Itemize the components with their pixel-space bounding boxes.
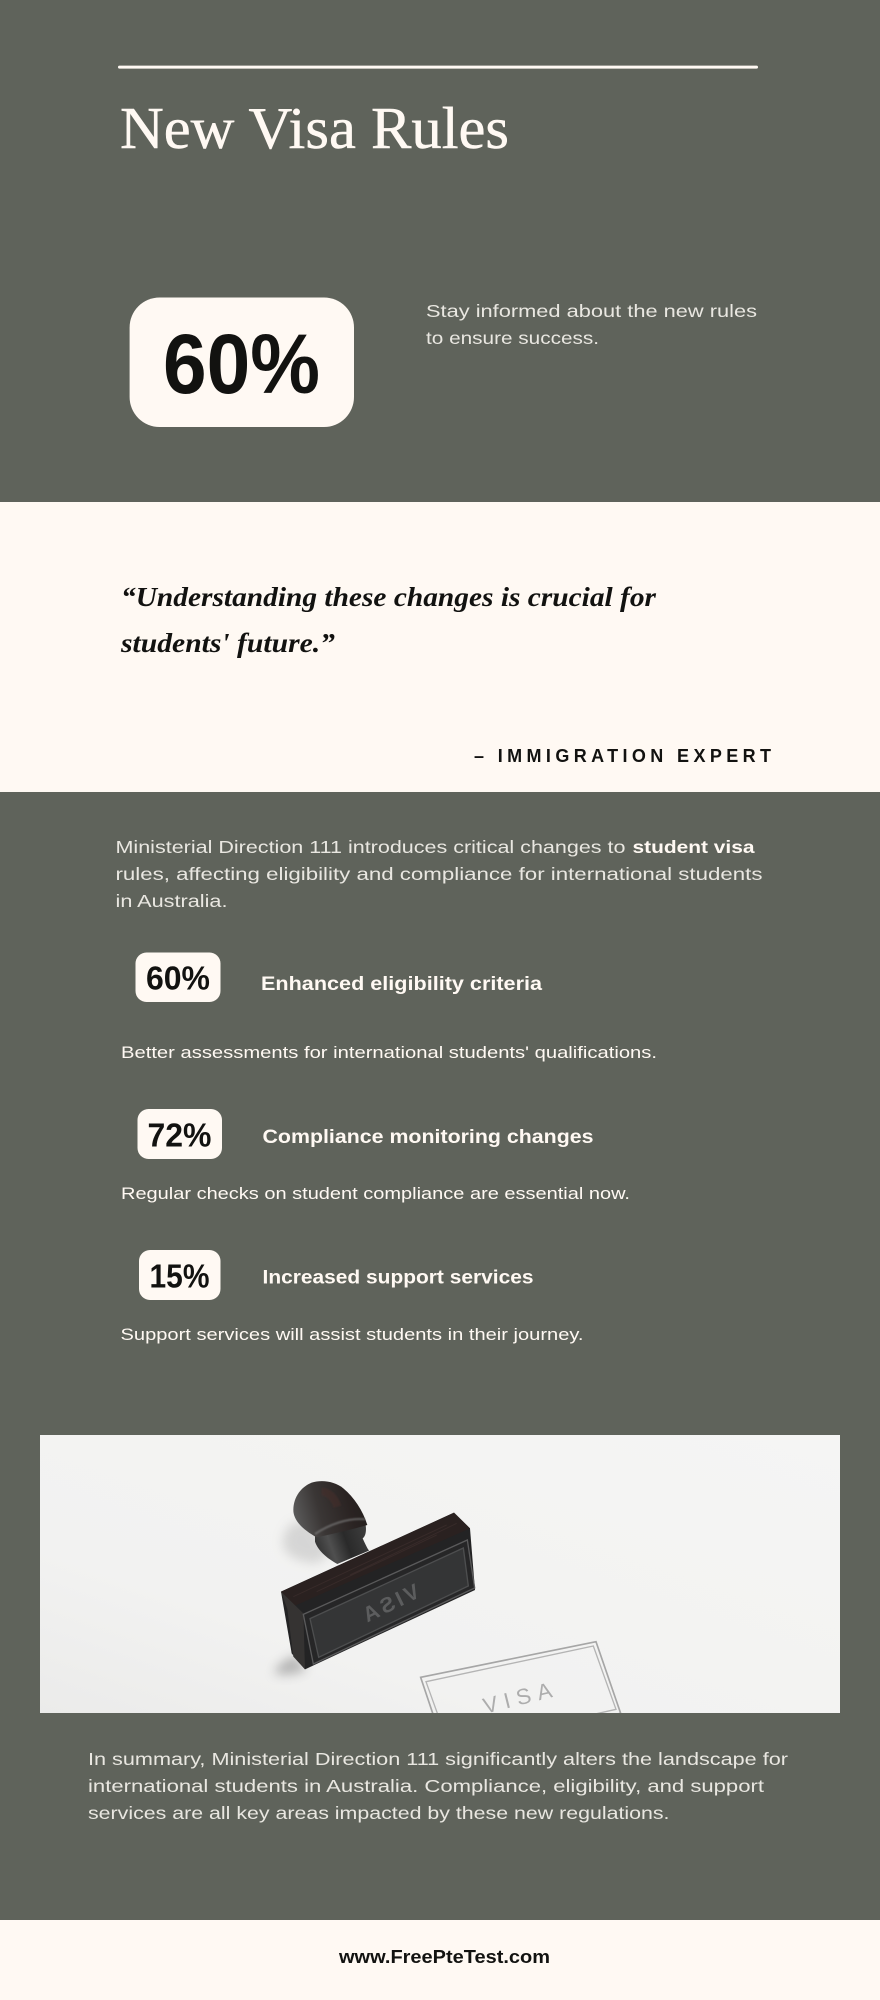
stat item: compliance [121,1109,630,1203]
quote: students' future.” [120,628,336,658]
quote attribution: – IMMIGRATION EXPERT [474,746,771,766]
item description: Regular checks on student compliance are essential now. [121,1184,630,1203]
handle neck [315,1522,369,1564]
text block: introduction paragraph [116,837,763,911]
item heading: Increased support services [262,1266,534,1288]
text block: summary: international students in Australia. Compliance, eligibility, and support [88,1776,764,1796]
stat item: support [120,1250,584,1344]
badge [136,952,220,1002]
stat box [130,298,354,427]
stat item: eligibility [121,952,657,1062]
title: New Visa Rules [120,95,509,161]
footer website link: www.FreePteTest.com [338,1947,550,1967]
text block: introduction paragraph: student visa [632,837,755,857]
badge number: 60% [146,960,210,998]
text block: summary: services are all key areas impacted by these new regulations. [88,1803,670,1823]
panel: quote background [0,502,880,792]
photo: visa rubber stamp [40,1435,840,1713]
text block: summary: In summary, Ministerial Direction 111 significantly alters the landscape for [88,1749,788,1769]
item description: Support services will assist students in their journey. [120,1325,584,1344]
panel: header background [0,0,880,502]
quote: “Understanding these changes is crucial for [121,582,657,612]
item heading: Enhanced eligibility criteria [261,973,542,995]
stat number: 60% [163,317,320,411]
quote [120,582,657,658]
badge [138,1109,222,1159]
stamp body [281,1513,475,1669]
badge number: 72% [148,1118,212,1154]
item description: Better assessments for international students' qualifications. [121,1043,657,1062]
text block: intro note: to ensure success. [426,328,599,348]
handle cap [293,1481,367,1537]
stamped impression [420,1640,622,1713]
text block: introduction paragraph: in Australia. [116,891,228,911]
text block: introduction paragraph: Ministerial Direction 111 introduces critical changes to [116,837,626,857]
badge [139,1250,220,1300]
callout: 60% stat [130,298,354,427]
text block: introduction paragraph: rules, affecting eligibility and compliance for international students [116,864,763,884]
wooden top face [281,1512,470,1593]
text block: intro note: Stay informed about the new rules [426,301,757,321]
badge number: 15% [150,1258,210,1296]
item heading: Compliance monitoring changes [262,1126,594,1148]
text block: intro note [426,301,757,348]
panel: footer background [0,1920,880,2000]
mirrored stamp lettering: VISA [356,1579,423,1629]
panel: key changes background [0,792,880,1920]
text block: summary [88,1749,788,1823]
impression lettering: VISA [480,1676,561,1719]
stamp face frame [303,1540,475,1664]
